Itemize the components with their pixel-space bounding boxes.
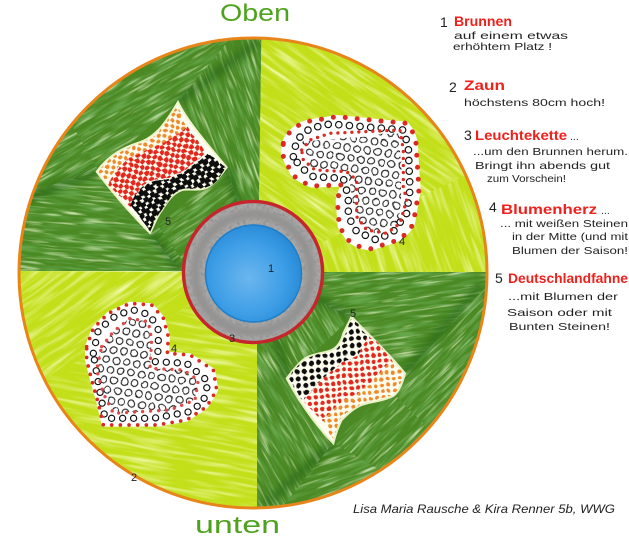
legend item 3: ... xyxy=(570,131,579,143)
legend item 3 xyxy=(464,127,628,185)
quadrants with crayon texture xyxy=(20,40,486,506)
legend item 5: Deutschlandfahne xyxy=(508,270,628,286)
legend item 1: erhöhtem Platz ! xyxy=(453,41,552,53)
plan number markers xyxy=(131,216,405,484)
heart ground xyxy=(87,303,217,425)
legend item 5: ...mit Blumen der xyxy=(508,291,619,303)
heart bed bottom-left xyxy=(87,303,217,425)
legend item 2 xyxy=(449,77,605,109)
plan number markers: 4 xyxy=(399,236,405,248)
flag ground xyxy=(287,317,405,443)
legend item 5: Saison oder mit xyxy=(507,307,612,319)
plan number markers: 5 xyxy=(350,308,356,320)
legend item 1 xyxy=(440,13,568,53)
legend item 3: 3 xyxy=(464,127,472,143)
legend item 1: Brunnen xyxy=(454,13,512,29)
flag ground xyxy=(97,102,227,233)
garden plan circle xyxy=(18,36,488,510)
flag bed bottom-right xyxy=(287,317,405,443)
plan number markers: 1 xyxy=(268,263,274,275)
heart bed top-right xyxy=(283,117,419,249)
interior stones xyxy=(97,318,198,413)
heading: top label: Oben xyxy=(220,0,290,27)
plan number markers: 3 xyxy=(229,333,235,345)
legend item 4: in der Mitte (und mit xyxy=(512,231,628,243)
water xyxy=(206,225,302,322)
stone ring xyxy=(93,310,208,418)
legend item 5: Bunten Steinen! xyxy=(509,321,610,333)
heart ground xyxy=(283,117,419,249)
quadrant: bottom-right lawn xyxy=(257,272,486,506)
plan number markers: 5 xyxy=(165,216,171,228)
orange rim xyxy=(19,38,487,508)
legend item 3: zum Vorschein! xyxy=(487,173,566,185)
legend item 2: 2 xyxy=(449,79,457,95)
quadrant: bottom-left lawn xyxy=(20,271,257,506)
legend item 3: ...um den Brunnen herum. xyxy=(473,146,628,158)
fountain xyxy=(184,202,322,342)
legend item 1: 1 xyxy=(440,14,448,30)
legend item 2: Zaun xyxy=(464,77,505,93)
legend item 4: 4 xyxy=(489,199,497,215)
quadrant: top-right lawn xyxy=(259,40,486,272)
legend item 2: höchstens 80cm hoch! xyxy=(464,97,605,109)
credit line: Lisa Maria Rausche & Kira Renner 5b, WWG xyxy=(353,502,615,516)
legend item 4 xyxy=(489,199,628,257)
fence ring xyxy=(184,202,322,342)
inner red dots xyxy=(302,130,407,233)
legend item 3: Leuchtekette xyxy=(475,127,567,143)
plan number markers: 2 xyxy=(131,472,137,484)
plan number markers: 4 xyxy=(171,343,177,355)
outer red dots xyxy=(283,117,419,249)
interior stones xyxy=(302,133,402,235)
flag bed top-left xyxy=(97,102,227,233)
legend item 4: Blumen der Saison! xyxy=(512,245,628,257)
outer red dots xyxy=(87,303,217,425)
grey band shading xyxy=(195,214,311,332)
quadrant: top-left lawn xyxy=(20,40,262,272)
inner red dots xyxy=(97,318,198,413)
legend item 4: ... xyxy=(601,205,610,217)
legend item 4: ... mit weißen Steinen xyxy=(500,218,628,230)
legend item 5: 5 xyxy=(495,270,503,286)
legend item 5 xyxy=(495,270,628,333)
flag dots xyxy=(288,318,403,440)
legend item 3: Bringt ihn abends gut xyxy=(475,160,610,172)
flag dots xyxy=(98,105,226,232)
gravel texture xyxy=(185,203,321,341)
heading: bottom label: unten xyxy=(195,512,280,539)
legend item 1: auf einem etwas xyxy=(454,30,568,42)
legend item 4: Blumenherz xyxy=(501,201,597,217)
stone ring xyxy=(293,124,410,240)
